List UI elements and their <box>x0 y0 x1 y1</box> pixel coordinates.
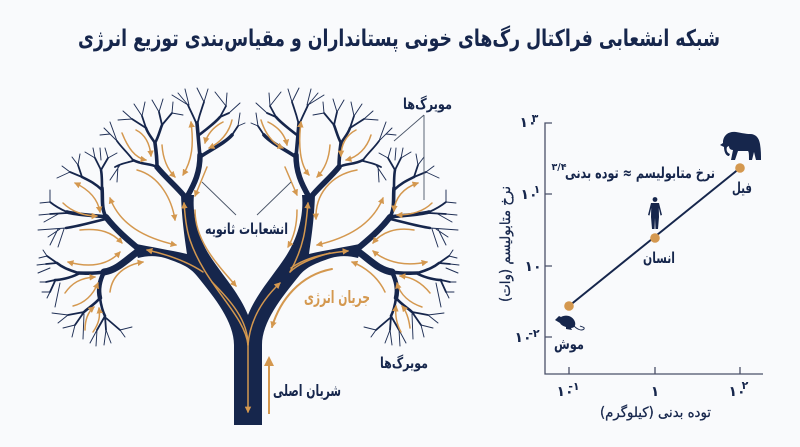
leader lines <box>202 115 424 215</box>
label: elephant: فیل <box>732 179 752 197</box>
energy flow arrows <box>63 120 432 412</box>
y axis title: نرخ متابولیسم (وات) <box>498 186 514 302</box>
label: capillaries bottom: مویرگ‌ها <box>380 354 428 372</box>
y tick labels: ۱ <box>534 183 540 196</box>
x tick labels: ۲ <box>742 379 749 392</box>
x tick labels: ۱ <box>651 384 659 400</box>
left half of branching tree <box>37 88 248 425</box>
label: mouse: موش <box>554 335 584 353</box>
x tick labels <box>556 379 749 400</box>
y tick labels: ۱۰ <box>519 115 537 131</box>
y tick labels: ۱۰ <box>520 187 538 203</box>
x tick labels: ۱۰ <box>556 384 574 400</box>
icon: human <box>648 197 662 229</box>
formula exponent: ۳/۴ <box>551 162 567 173</box>
label: main artery: شریان اصلی <box>273 381 341 400</box>
x tick labels: ۱۰ <box>728 384 746 400</box>
icon: mouse <box>555 316 584 330</box>
label: human: انسان <box>643 249 675 267</box>
x tick labels: -۱ <box>568 380 580 393</box>
right half of branching tree <box>248 88 459 425</box>
label: secondary branches: انشعابات ثانویه <box>205 220 288 238</box>
main artery flow arrow <box>264 356 274 414</box>
panel: metabolic scaling chart <box>498 112 763 421</box>
y tick labels: ۱۰ <box>514 330 532 346</box>
label: energy flow: جریان انرژی <box>304 288 370 308</box>
label: capillaries top: مویرگ‌ها <box>403 95 452 113</box>
trend line <box>569 168 740 306</box>
y tick labels <box>514 112 542 346</box>
icon: elephant <box>720 132 761 160</box>
y tick labels: ۳ <box>532 112 539 125</box>
panel: fractal vascular tree <box>37 88 459 425</box>
x axis title: توده بدنی (کیلوگرم) <box>600 404 711 421</box>
y tick labels: ۱۰ <box>524 259 542 275</box>
y tick labels: -۲ <box>528 327 540 340</box>
formula: نرخ متابولیسم ≈ توده بدنی <box>565 164 715 182</box>
data points <box>564 163 745 311</box>
axes <box>545 123 763 374</box>
